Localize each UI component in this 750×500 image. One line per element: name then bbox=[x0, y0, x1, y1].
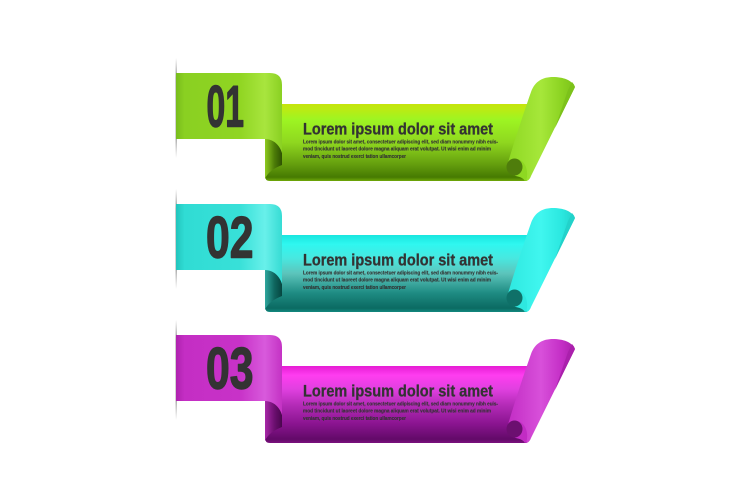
heading 03: Lorem ipsum dolor sit amet bbox=[303, 382, 493, 400]
fold 02 bbox=[265, 270, 282, 310]
body text 03: Lorem ipsum dolor sit amet, consectetuer adipiscing elit, sed diam nonummy nibh euis- bbox=[303, 402, 498, 408]
number tab 03 bbox=[176, 335, 282, 415]
banner 03 bbox=[176, 320, 575, 443]
body text 01: mod tincidunt ut laoreet dolore magna aliquam erat volutpat. Ut wisi enim ad minim bbox=[303, 146, 491, 152]
body text 03: veniam, quis nostrud exerci tation ullamcorper bbox=[303, 416, 407, 422]
banner 01 bbox=[176, 58, 575, 181]
banner 02 bbox=[176, 189, 575, 312]
fold 01 bbox=[265, 139, 282, 179]
body text 03 bbox=[303, 402, 498, 422]
body text 02: veniam, quis nostrud exerci tation ullamcorper bbox=[303, 285, 407, 291]
body panel 02 bbox=[265, 235, 527, 312]
body text 01: veniam, quis nostrud exerci tation ullamcorper bbox=[303, 154, 407, 160]
body panel 03 bbox=[265, 366, 527, 443]
number tab 02 bbox=[176, 204, 282, 284]
page curl 02 bbox=[506, 208, 575, 312]
number 01: 01 bbox=[206, 74, 244, 140]
body text 01: Lorem ipsum dolor sit amet, consectetuer adipiscing elit, sed diam nonummy nibh euis- bbox=[303, 140, 498, 146]
heading 02: Lorem ipsum dolor sit amet bbox=[303, 252, 493, 270]
body text 02 bbox=[303, 270, 498, 291]
body text 02: mod tincidunt ut laoreet dolore magna aliquam erat volutpat. Ut wisi enim ad minim bbox=[303, 278, 491, 284]
fold 03 bbox=[265, 401, 282, 441]
number 02: 02 bbox=[206, 206, 254, 270]
number tab 01 bbox=[176, 73, 282, 153]
body text 02: Lorem ipsum dolor sit amet, consectetuer adipiscing elit, sed diam nonummy nibh euis- bbox=[303, 270, 498, 276]
page curl 01 bbox=[506, 77, 575, 181]
number 03: 03 bbox=[206, 336, 254, 402]
body panel 01 bbox=[265, 104, 527, 181]
body text 01 bbox=[303, 140, 498, 160]
heading 01: Lorem ipsum dolor sit amet bbox=[303, 120, 493, 138]
body text 03: mod tincidunt ut laoreet dolore magna aliquam erat volutpat. Ut wisi enim ad minim bbox=[303, 408, 491, 414]
page curl 03 bbox=[506, 339, 575, 443]
